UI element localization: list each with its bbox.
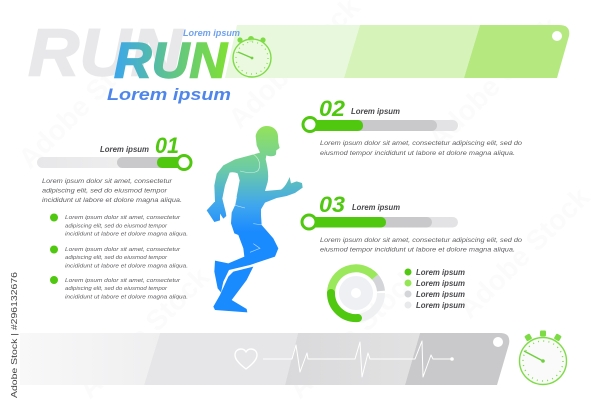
bullet item 3: adipiscing elit, sed do eiusmod tempor [65, 286, 168, 292]
donut chart [331, 268, 381, 318]
02 paragraph: eiusmod tempor incididunt ut labore et dolore magna aliqua. [320, 150, 515, 157]
small blue caption: Lorem ipsum [183, 28, 240, 38]
03 label: Lorem ipsum [352, 203, 400, 212]
01 label: Lorem ipsum [100, 145, 149, 154]
bullet item 3: Lorem ipsum dolor sit amet, consectetur [65, 278, 181, 284]
02 number: 02 [319, 96, 346, 121]
03 paragraph: eiusmod tempor incididunt ut labore et dolore magna aliqua. [320, 246, 515, 254]
bullet item 2: incididunt ut labore et dolore magna aliqua. [65, 264, 188, 270]
03 paragraph [320, 237, 522, 254]
01 paragraph: incididunt ut labore et dolore magna aliqua. [42, 197, 182, 204]
02 paragraph: Lorem ipsum dolor sit amet, consectetur adipiscing elit, sed do [320, 140, 522, 147]
01 paragraph: Lorem ipsum dolor sit amet, consectetur [42, 178, 173, 185]
bullet item 3 [50, 276, 188, 300]
section 03 [302, 192, 522, 254]
top banner [225, 25, 569, 78]
donut legend [404, 268, 465, 310]
section 01 [37, 133, 191, 300]
title: background RUN: RUN [28, 16, 184, 90]
donut legend: Lorem ipsum [416, 301, 465, 310]
03 paragraph: Lorem ipsum dolor sit amet, consectetur adipiscing elit, sed do [320, 237, 522, 244]
01 number: 01 [155, 133, 179, 158]
blue subtitle: Lorem ipsum [107, 85, 231, 104]
runner silhouette [207, 126, 303, 312]
bullet item 2: adipiscing elit, sed do eiusmod tempor [65, 255, 168, 261]
bullet item 1 [50, 214, 188, 238]
icon: top stopwatch [233, 36, 271, 77]
03 progress bar [302, 215, 458, 229]
bullet item 2 [50, 246, 188, 270]
banner hole [552, 31, 562, 41]
side credit text: Adobe Stock | #296132676 [9, 272, 19, 398]
02 paragraph [320, 140, 522, 157]
bottom banner [20, 333, 509, 385]
watermark: Adobe Stock [422, 11, 566, 154]
icon: heart [235, 349, 257, 369]
bullet item 1: incididunt ut labore et dolore magna aliqua. [65, 232, 188, 238]
watermark: Adobe Stock [452, 181, 596, 324]
watermark: Adobe Stock [72, 261, 216, 404]
bottom banner hole [493, 337, 503, 347]
icon: bottom stopwatch [520, 330, 566, 384]
02 label: Lorem ipsum [351, 107, 400, 116]
01 paragraph [42, 178, 182, 204]
01 paragraph: adipiscing elit, sed do eiusmod tempor [42, 188, 168, 194]
bullet item 3: incididunt ut labore et dolore magna aliqua. [65, 294, 188, 300]
bullet item 1: adipiscing elit, sed do eiusmod tempor [65, 224, 168, 230]
watermark: Adobe Stock [12, 31, 156, 174]
bullet item 1: Lorem ipsum dolor sit amet, consectetur [65, 215, 181, 221]
donut legend: Lorem ipsum [416, 268, 465, 277]
heart rate line [235, 341, 454, 377]
donut legend: Lorem ipsum [416, 290, 465, 299]
watermark: Adobe Stock [282, 261, 426, 404]
02 progress bar [303, 118, 458, 132]
section 02 [303, 96, 522, 157]
03 number: 03 [319, 192, 345, 217]
donut legend: Lorem ipsum [416, 279, 465, 288]
bullet item 2: Lorem ipsum dolor sit amet, consectetur [65, 247, 181, 253]
title: coloured RUN: RUN [114, 32, 228, 88]
01 progress bar [37, 156, 191, 170]
